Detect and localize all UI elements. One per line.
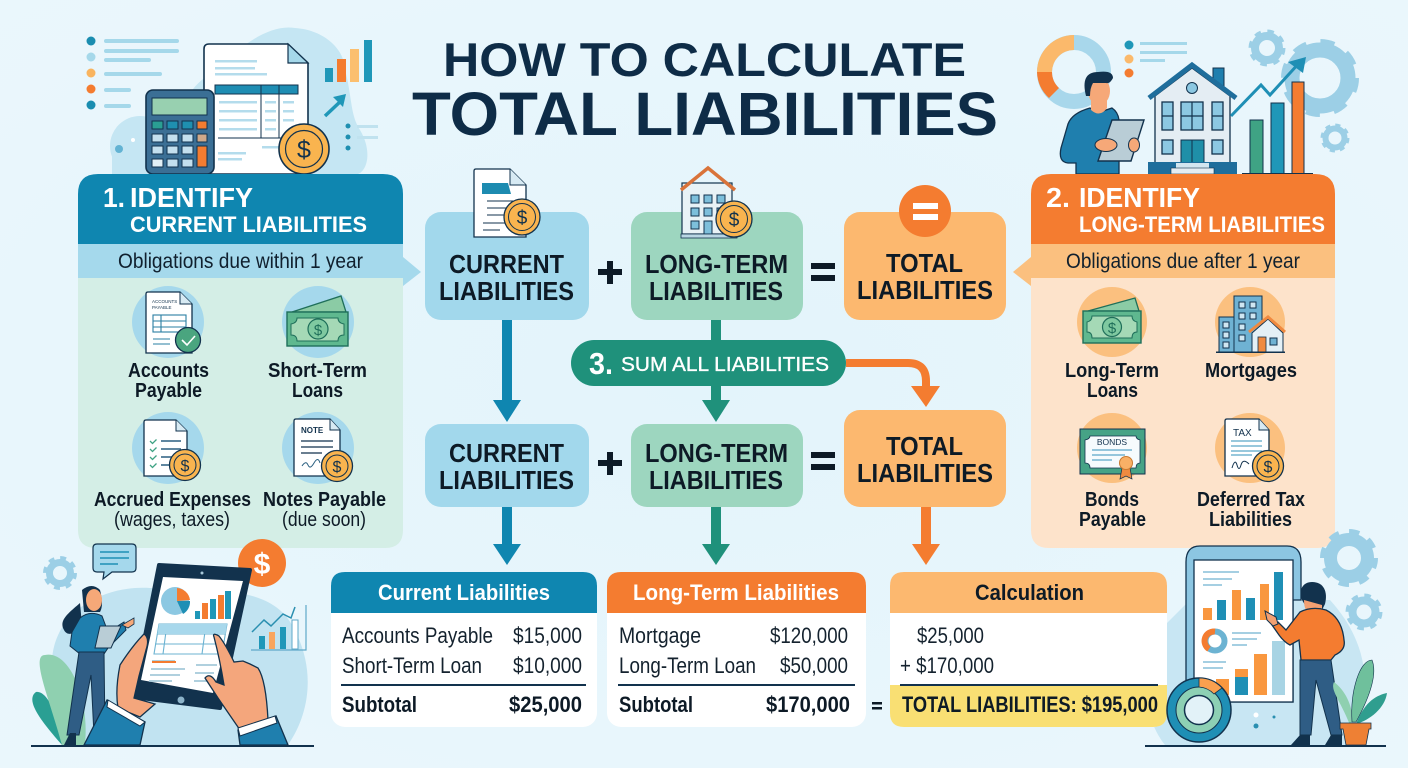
- subtitle band: [1031, 244, 1335, 278]
- panel header: [1031, 174, 1335, 244]
- table: calculation: [890, 572, 1167, 727]
- table: current liabilities: Short-Term Loan: [342, 653, 482, 678]
- icon: accounts payable: [132, 286, 204, 358]
- table: long-term liabilities: Subtotal: [619, 692, 693, 717]
- icon: bonds certificate: [1077, 413, 1147, 483]
- table: current liabilities: $25,000: [509, 692, 582, 717]
- table: long-term liabilities: $120,000: [770, 623, 848, 648]
- illustration: analyst with dashboard phone: [1145, 532, 1387, 747]
- step 1 heading: CURRENT LIABILITIES: [130, 212, 367, 237]
- labels: current liability types: Accrued Expenses: [94, 488, 251, 511]
- labels: long-term liability types: Liabilities: [1209, 508, 1292, 531]
- arrow: current to table: [493, 507, 521, 565]
- icon: equals badge: [899, 185, 951, 237]
- table: calculation: $25,000: [917, 623, 984, 648]
- box: current liabilities top row: LIABILITIES: [439, 276, 574, 306]
- subtitle band: Obligations due after 1 year: [1066, 250, 1300, 273]
- table: calculation: Calculation: [975, 580, 1084, 605]
- icon: accrued expenses checklist: [132, 412, 204, 484]
- arrow pointer to current liabilities: [403, 257, 421, 286]
- table: long-term liabilities: Long-Term Liabilities: [633, 580, 839, 605]
- operator: plus second row: [598, 452, 622, 475]
- icon: deferred tax document: $: [1264, 459, 1273, 476]
- total highlight: TOTAL LIABILITIES: $195,000: [902, 692, 1158, 717]
- labels: long-term liability types: Bonds: [1085, 488, 1139, 511]
- table: current liabilities: Current Liabilities: [378, 580, 550, 605]
- step 3 pill: 3.: [589, 346, 613, 381]
- panel: step 1 current liabilities: [78, 174, 421, 548]
- labels: current liability types: Payable: [135, 379, 202, 402]
- arrow: step 3 to total liabilities: [846, 363, 940, 407]
- arrow: long-term to table: [702, 507, 730, 565]
- box: current liabilities top row: [425, 212, 589, 320]
- table: current liabilities: $15,000: [513, 623, 582, 648]
- step 3 pill: [571, 340, 846, 386]
- arrow: current down to row two: [493, 320, 521, 422]
- panel: step 2 long-term liabilities: [1013, 174, 1335, 548]
- icon: mortgages buildings and house: [1215, 287, 1285, 357]
- icon: short-term loans cash: $: [314, 322, 323, 339]
- box: long-term liabilities second row: [631, 424, 803, 507]
- panel header: [78, 174, 403, 244]
- step 2 heading: [1046, 182, 1325, 237]
- panel body: [1031, 270, 1335, 548]
- icon: notes payable: [282, 412, 354, 484]
- arrow: total to calculation: [912, 507, 940, 565]
- panel body: [78, 270, 403, 548]
- labels: long-term liability types: Mortgages: [1205, 359, 1297, 382]
- box: long-term liabilities top row: LIABILITIES: [649, 276, 783, 306]
- labels: current liability types: Notes Payable: [263, 488, 386, 511]
- box: total liabilities top row: [844, 212, 1006, 320]
- icon: deferred tax document: TAX: [1233, 428, 1252, 439]
- table: long-term liabilities: $50,000: [780, 653, 848, 678]
- icon: current liabilities document: $: [517, 208, 528, 229]
- labels: long-term liability types: Long-Term: [1065, 359, 1159, 382]
- icon: long-term building: [681, 168, 752, 238]
- icon: bonds certificate: BONDS: [1097, 437, 1127, 447]
- arrow pointer to total liabilities: [1013, 257, 1031, 286]
- box: long-term liabilities top row: LONG-TERM: [645, 249, 788, 279]
- illustration: tablet with hands and woman: [31, 539, 314, 747]
- labels: long-term liability types: [1065, 359, 1306, 531]
- arrow: long-term down to row two: [702, 320, 730, 422]
- labels: current liability types: Accounts: [128, 359, 209, 382]
- icon: long-term loans cash: [1077, 287, 1147, 357]
- icon: accounts payable: ACCOUNTS: [152, 299, 177, 304]
- icon: short-term loans cash: [282, 286, 354, 358]
- labels: long-term liability types: Payable: [1079, 508, 1146, 531]
- icon: accounts payable: PAYABLE: [152, 305, 172, 310]
- table: current liabilities: Subtotal: [342, 692, 417, 717]
- step 1 heading: 1.: [103, 182, 125, 213]
- illustration: calculator and document: $: [297, 136, 311, 164]
- labels: current liability types: Loans: [292, 379, 343, 402]
- icon: current liabilities document: [474, 169, 540, 237]
- box: current liabilities second row: CURRENT: [449, 438, 564, 468]
- labels: current liability types: (wages, taxes): [114, 509, 230, 531]
- table: long-term liabilities: Long-Term Loan: [619, 653, 756, 678]
- total highlight: [890, 684, 1167, 727]
- table: current liabilities: Accounts Payable: [342, 623, 493, 648]
- operator: equals second row: [811, 452, 835, 470]
- icon: deferred tax document: [1215, 413, 1285, 483]
- box: long-term liabilities second row: LIABILITIES: [649, 465, 783, 495]
- title: TOTAL LIABILITIES: [412, 80, 998, 148]
- icon: notes payable: $: [333, 459, 342, 476]
- background blob behind analyst: [1145, 600, 1365, 745]
- box: current liabilities second row: [425, 424, 589, 507]
- step 2 heading: 2.: [1046, 182, 1070, 213]
- step 2 heading: LONG-TERM LIABILITIES: [1079, 212, 1325, 237]
- operator: plus top row: [598, 261, 622, 284]
- title: HOW TO CALCULATE: [443, 33, 966, 86]
- step 3 pill: SUM ALL LIABILITIES: [621, 354, 829, 376]
- table: long-term liabilities: [607, 572, 866, 727]
- subtitle band: [78, 244, 403, 278]
- step 2 heading: IDENTIFY: [1079, 182, 1200, 213]
- box: long-term liabilities second row: LONG-TERM: [645, 438, 788, 468]
- illustration: calculator and document: [86, 28, 378, 176]
- table: long-term liabilities: Mortgage: [619, 623, 701, 648]
- operator: equals before total: [872, 702, 882, 710]
- labels: long-term liability types: Deferred Tax: [1197, 488, 1306, 511]
- labels: current liability types: (due soon): [282, 509, 366, 531]
- operator: equals top row: [811, 263, 835, 281]
- box: total liabilities second row: TOTAL: [886, 431, 963, 461]
- table: current liabilities: [331, 572, 597, 727]
- box: total liabilities second row: LIABILITIES: [857, 458, 993, 488]
- illustration: tablet with hands and woman: $: [254, 548, 271, 581]
- table: long-term liabilities: $170,000: [766, 692, 850, 717]
- labels: current liability types: [94, 359, 386, 531]
- table: calculation: + $170,000: [900, 653, 994, 678]
- subtitle band: Obligations due within 1 year: [118, 250, 363, 273]
- box: total liabilities top row: TOTAL: [886, 248, 963, 278]
- icon: long-term loans cash: $: [1108, 320, 1117, 337]
- step 1 heading: [103, 182, 367, 237]
- box: current liabilities top row: CURRENT: [449, 249, 564, 279]
- box: long-term liabilities top row: [631, 212, 803, 320]
- illustration: person, house and growth chart: [1037, 32, 1356, 174]
- icon: accrued expenses checklist: $: [181, 458, 190, 475]
- box: total liabilities top row: LIABILITIES: [857, 275, 993, 305]
- title: [412, 33, 998, 148]
- icon: notes payable: NOTE: [301, 426, 324, 435]
- box: total liabilities second row: [844, 410, 1006, 507]
- box: current liabilities second row: LIABILITIES: [439, 465, 574, 495]
- labels: long-term liability types: Loans: [1087, 379, 1138, 402]
- step 1 heading: IDENTIFY: [130, 182, 253, 213]
- labels: current liability types: Short-Term: [268, 359, 367, 382]
- table: current liabilities: $10,000: [513, 653, 582, 678]
- icon: long-term building: $: [729, 210, 740, 231]
